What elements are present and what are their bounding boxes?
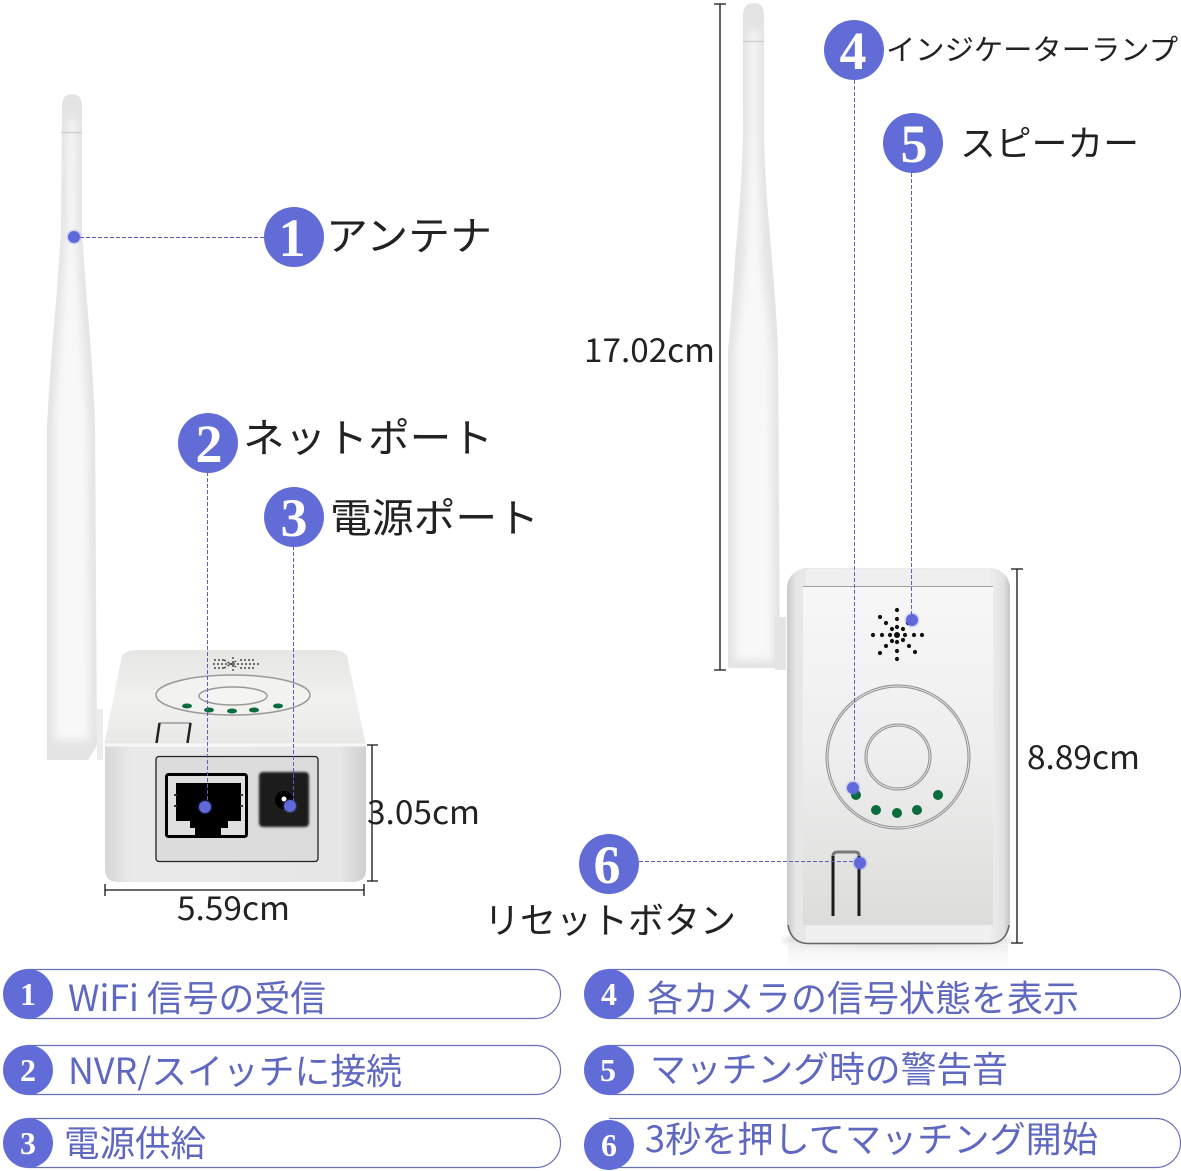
callout 6: reset button: リセットボタン: [484, 892, 736, 944]
dimension: 5.59cm: 5.59cm: [177, 884, 290, 930]
callout 5: speaker: [883, 113, 1139, 626]
device top surface: [104, 650, 366, 745]
callout 2: net port: 2: [196, 414, 222, 474]
left device: [104, 650, 366, 882]
indicator ring on top: [156, 675, 310, 715]
callout 3: power port: [264, 486, 539, 812]
right antenna: [728, 3, 786, 670]
device shell: [787, 568, 1010, 944]
callout 6: reset button: 6: [594, 835, 620, 895]
left antenna: [47, 94, 103, 760]
legend 1: [3, 969, 560, 1022]
legend 3: [3, 1115, 560, 1168]
device base edge: [788, 925, 1009, 944]
legend 5: [584, 1041, 1180, 1095]
right device: [782, 568, 1012, 969]
net port: [166, 774, 246, 836]
callout 3: power port: 3: [280, 488, 308, 548]
legend 3: 3: [20, 1125, 36, 1161]
power port: [259, 772, 309, 827]
legend 4: 各カメラの信号状態を表示: [647, 970, 1079, 1022]
callout 5: speaker: スピーカー: [960, 115, 1139, 167]
callout 2: net port: ネットポート: [243, 406, 493, 464]
legend 4: 4: [601, 976, 617, 1012]
shadow and reflection: [782, 932, 1012, 948]
legend 5: 5: [600, 1052, 616, 1088]
legend 6: [584, 1111, 1180, 1170]
callout 5: speaker: 5: [900, 114, 928, 174]
callout 1: antenna: 1: [278, 208, 306, 268]
dimension: 5.59cm: [105, 884, 364, 930]
speaker dots on top: [213, 657, 259, 671]
legend 2: NVR/スイッチに接続: [68, 1043, 402, 1095]
device face: [803, 587, 993, 925]
callout 3: power port: 電源ポート: [330, 486, 539, 544]
callout 4: indicator lamp: インジケーターランプ: [886, 27, 1178, 69]
dimension: 3.05cm: [367, 745, 480, 881]
indicator ring: [827, 686, 969, 828]
callout 4: indicator lamp: 4: [840, 21, 866, 81]
legend 2: [3, 1043, 560, 1095]
callout 4: indicator lamp: [824, 20, 1178, 794]
callout 1: antenna: アンテナ: [326, 204, 492, 262]
dimension: 17.02cm: [584, 4, 726, 670]
callout 2: net port: [178, 406, 493, 813]
legend 2: 2: [20, 1052, 36, 1088]
reset slot on top: [156, 723, 191, 743]
callout 1: antenna: [68, 204, 492, 268]
dimension: 3.05cm: 3.05cm: [367, 788, 480, 834]
dimension: 17.02cm: 17.02cm: [584, 326, 715, 372]
dimension: 8.89cm: 8.89cm: [1027, 733, 1140, 779]
port panel: [156, 756, 318, 862]
legend 1: WiFi 信号の受信: [68, 970, 326, 1022]
legend 6: 3秒を押してマッチング開始: [645, 1111, 1098, 1163]
callout 6: reset button: [484, 834, 866, 944]
device front: [105, 746, 366, 882]
legend 6: 6: [601, 1127, 617, 1163]
legend 1: 1: [20, 976, 36, 1012]
legend 3: 電源供給: [64, 1115, 206, 1167]
speaker holes: [871, 608, 924, 661]
dimension: 8.89cm: [1011, 569, 1140, 943]
reset slot: [833, 852, 859, 916]
legend 5: マッチング時の警告音: [650, 1041, 1008, 1093]
